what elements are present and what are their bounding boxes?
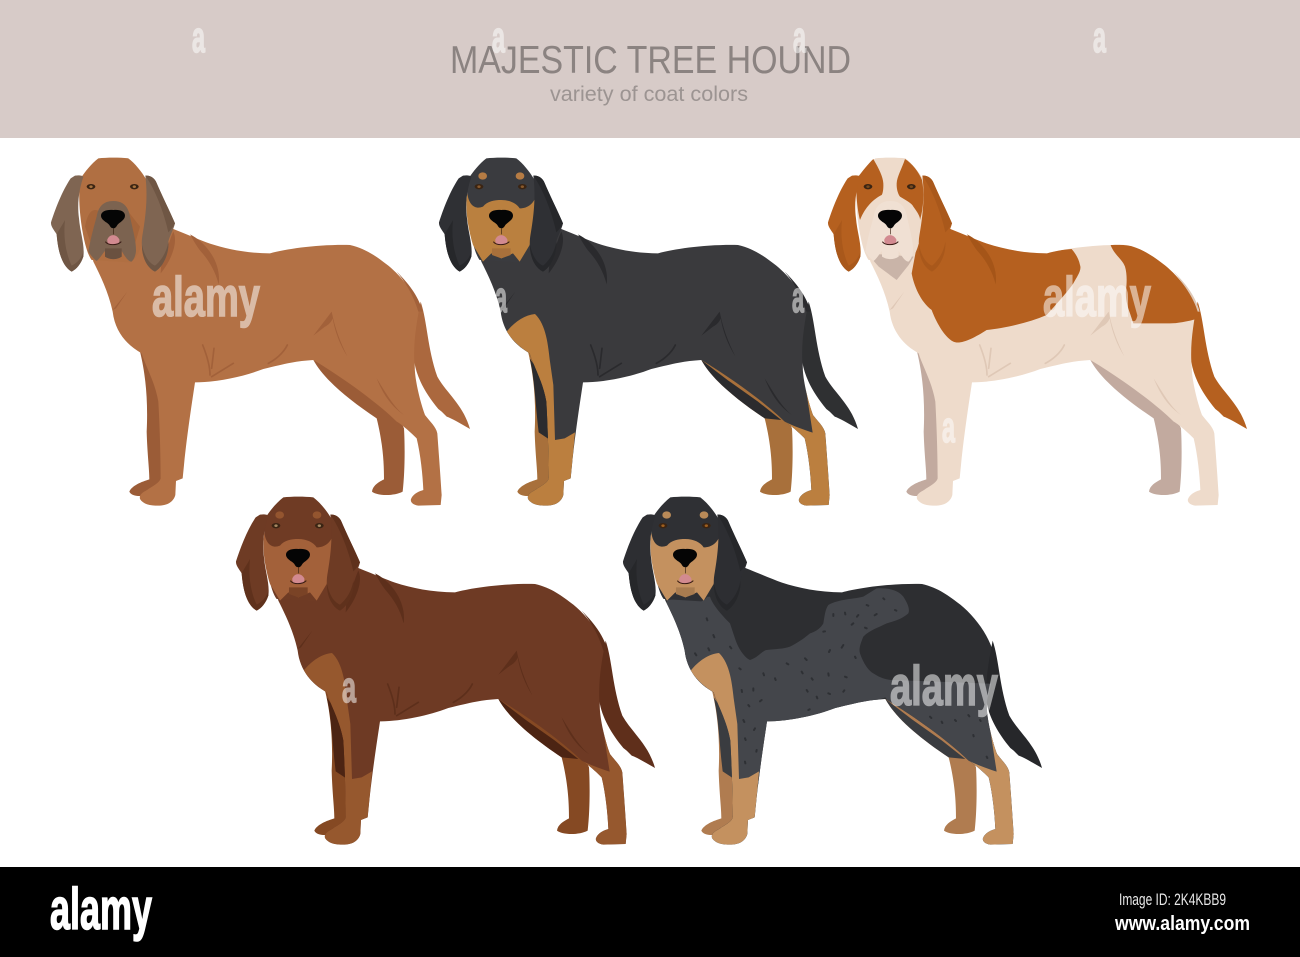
image id: Image ID: 2K4KBB9: [1119, 890, 1226, 909]
tan leg markings: [691, 653, 1014, 845]
shoulder fold: [967, 234, 996, 284]
footer bar: [0, 867, 1300, 957]
watermarks: a: [942, 403, 955, 452]
tail: [986, 641, 1042, 768]
head: [623, 497, 747, 611]
watermarks: a: [192, 13, 205, 62]
body: [475, 212, 830, 506]
dog: red and white coat: [828, 158, 1247, 506]
tail: [1191, 302, 1247, 429]
red shoulder and rump patches: [912, 225, 1199, 343]
title: MAJESTIC TREE HOUND: [450, 39, 851, 82]
body: [272, 551, 627, 845]
tan leg markings: [507, 314, 830, 506]
tail: [414, 302, 470, 429]
dog: bluetick coat: [623, 497, 1042, 845]
body: [659, 551, 1014, 845]
head: [828, 158, 952, 280]
grey ticked patches: [667, 588, 1002, 784]
tail: [802, 302, 858, 429]
ticking spots: [695, 598, 987, 763]
tan leg markings: [304, 653, 627, 845]
body creases: [501, 232, 811, 415]
dark upper far legs: [714, 697, 965, 778]
dark upper far legs: [327, 697, 578, 778]
tail: [599, 641, 655, 768]
header band: [0, 0, 1300, 138]
subtitle: variety of coat colors: [550, 83, 748, 106]
dark upper far legs: [530, 358, 781, 439]
watermarks: a: [342, 663, 356, 712]
watermarks: alamy: [152, 265, 260, 328]
dog: black and tan coat: [439, 158, 858, 506]
body creases: [298, 571, 608, 754]
watermarks: [152, 13, 1151, 717]
watermarks: a: [495, 273, 507, 322]
watermarks: a: [792, 273, 804, 322]
dog: chocolate coat: [236, 497, 655, 845]
body: [87, 212, 442, 506]
head: [51, 158, 175, 272]
head: [236, 497, 360, 611]
website: www.alamy.com: [1114, 913, 1250, 935]
head: [439, 158, 563, 272]
watermarks: a: [1093, 13, 1106, 62]
body: [864, 212, 1219, 506]
watermarks: alamy: [1043, 265, 1151, 328]
watermarks: a: [492, 13, 505, 62]
dog: fawn red coat: [51, 158, 470, 506]
body creases: [113, 232, 423, 415]
body creases: [890, 232, 1200, 415]
footer logo: alamy: [50, 877, 152, 942]
watermarks: alamy: [890, 654, 998, 717]
watermarks: a: [793, 13, 806, 62]
